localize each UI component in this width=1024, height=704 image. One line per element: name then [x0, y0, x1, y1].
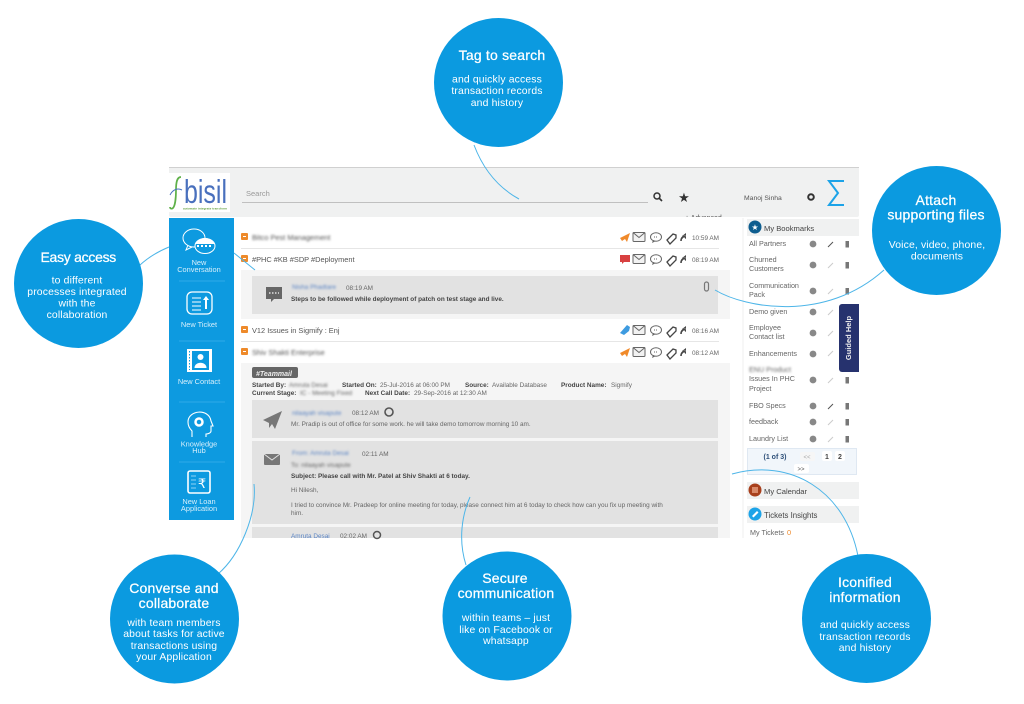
nav: new conversation: New — [192, 258, 207, 267]
row: Shiv Shakti Enterprise: 08:12 AM — [692, 350, 719, 357]
header bar — [169, 167, 859, 222]
nav: new contact — [178, 349, 220, 386]
settings icon — [808, 194, 814, 200]
row: Bitco Pest Management: 10:59 AM — [692, 235, 719, 242]
my tickets: My Tickets — [750, 528, 784, 537]
app screenshot panel — [169, 167, 859, 540]
row: V12 issues in Sigmify — [241, 325, 719, 342]
my calendar heading — [747, 482, 859, 499]
bookmark action icons — [810, 241, 849, 442]
tag: teammail — [252, 367, 298, 378]
bookmarks list: feedback — [749, 417, 779, 426]
expanded note panel: Steps to be followed while deployment of patch on test stage and live. — [291, 296, 504, 303]
callout: iconified information: transaction records — [819, 632, 911, 643]
note icon — [266, 287, 282, 302]
thread metadata: Current Stage: — [252, 390, 296, 397]
callout: secure communication — [442, 552, 572, 680]
row: Shiv Shakti Enterprise — [241, 348, 719, 359]
thread metadata: Sigmify — [611, 382, 633, 389]
message: email: Hi Nilesh, — [291, 487, 319, 494]
callout: tag to search: Tag to search — [459, 47, 545, 63]
my calendar heading: My Calendar — [764, 487, 808, 496]
pager: 1 — [825, 454, 829, 461]
callout: easy access: Easy access — [40, 249, 116, 265]
nav: new loan application — [181, 471, 217, 513]
nav: knowledge hub: Knowledge — [181, 440, 217, 448]
bookmarks heading: ★ — [751, 223, 759, 232]
row: V12 issues in Sigmify: 08:16 AM — [692, 328, 719, 335]
message: email: 02:11 AM — [362, 451, 389, 458]
callout: converse and collaborate: collaborate — [139, 595, 209, 611]
nav: new ticket: New Ticket — [181, 320, 217, 329]
callout: easy access: collaboration — [47, 310, 108, 321]
expanded thread panel — [241, 363, 730, 540]
bookmarks list: Churned — [749, 255, 777, 264]
callout: easy access — [14, 219, 143, 348]
callout: secure communication: communication — [458, 585, 554, 601]
connector: converse — [218, 484, 254, 574]
connector: iconified information — [732, 470, 858, 556]
callout: easy access: with the — [57, 298, 96, 310]
expanded note panel — [241, 270, 730, 319]
callout: tag to search: transaction records — [451, 86, 543, 97]
thread metadata: Amruta Desai — [289, 382, 328, 389]
right sidebar — [743, 218, 859, 538]
callout: easy access: to different — [52, 276, 102, 286]
my tickets: 0 — [787, 528, 791, 537]
message: plane: 08:12 AM — [352, 410, 379, 417]
nav: new contact: New Contact — [178, 377, 220, 386]
nav: new conversation: Conversation — [177, 265, 221, 274]
guided help tab: Guided Help — [844, 315, 853, 360]
callout: iconified information: information — [829, 589, 901, 605]
logo: automate integrate transform — [183, 206, 227, 210]
callout: tag to search: and quickly access — [452, 74, 542, 86]
callout: converse and collaborate — [110, 554, 239, 684]
row: Bitco Pest Management — [241, 232, 719, 248]
thread metadata: Next Call Date: — [365, 390, 410, 397]
bookmarks list: Laundry List — [749, 434, 788, 443]
pager: >> — [797, 467, 805, 473]
callout: converse and collaborate: Converse and — [129, 580, 219, 596]
bookmarks list: Communication — [749, 281, 799, 290]
message: email: I tried to convince Mr. Pradeep for online meeting for today, please connect him at 6 today to check how can you fix up meeting with — [291, 502, 663, 509]
search field: Search — [246, 189, 270, 198]
callout: secure communication: within teams – just — [461, 613, 550, 624]
thread metadata: Started By: — [252, 382, 286, 389]
bookmarks list: All Partners — [749, 239, 787, 248]
bookmarks list: Enhancements — [749, 349, 797, 358]
callout: secure communication: like on Facebook or — [459, 625, 553, 636]
callout: attach supporting files: Voice, video, phone, — [889, 240, 985, 251]
thread metadata: IC - Meeting Fixed — [300, 390, 353, 397]
message: email: Subject: Please call with Mr. Patel at Shiv Shakti at 6 today. — [291, 473, 470, 480]
callout: attach supporting files: documents — [911, 252, 963, 262]
message: email: To: nilaayah visapute — [291, 462, 351, 469]
thread metadata — [252, 382, 633, 397]
guided help tab — [839, 304, 859, 372]
tag: teammail: #Teammail — [256, 371, 293, 378]
paperclip icon — [704, 282, 708, 291]
callout: secure communication: Secure — [482, 570, 528, 586]
message: email: From: Amruta Desai — [292, 450, 349, 457]
row: deployment tags: 08:19 AM — [692, 257, 719, 264]
thread metadata: Available Database — [492, 382, 547, 389]
callout: iconified information: Iconified — [838, 574, 892, 590]
callout: easy access: processes integrated — [27, 287, 127, 298]
callout: iconified information: and quickly access — [820, 620, 910, 631]
message: plane: nilaayah visapute — [292, 410, 342, 417]
expanded note panel: Nisha Phadtare — [292, 284, 336, 291]
callout: attach supporting files — [872, 166, 1001, 295]
message: plane: Mr. Pradip is out of office for some work. he will take demo tomorrow morning 10 am. — [291, 421, 531, 428]
row: Shiv Shakti Enterprise: Shiv Shakti Enterprise — [252, 348, 325, 357]
bookmarks list: Customers — [749, 264, 784, 273]
bookmarks list: Issues In PHC — [749, 374, 795, 383]
bookmarks list: Contact list — [749, 332, 785, 341]
callout: converse and collaborate: transactions using — [131, 641, 217, 652]
message: plane — [252, 400, 718, 438]
connector: attach files — [715, 270, 884, 307]
callout: secure communication: whatsapp — [482, 636, 529, 647]
message: partial: Amruta Desai — [291, 533, 330, 540]
callout: attach supporting files: supporting files — [887, 206, 985, 222]
callout: attach supporting files: Attach — [916, 192, 956, 208]
bookmarks list: ENU Product — [749, 365, 791, 374]
sigma icon — [829, 181, 844, 205]
bookmarks heading — [747, 219, 859, 236]
bookmarks list: FBO Specs — [749, 401, 786, 410]
tickets insights heading: Tickets Insights — [764, 511, 818, 520]
pager: (1 of 3) — [764, 454, 786, 461]
nav: new ticket — [181, 292, 217, 329]
logo — [169, 173, 230, 212]
row: Bitco Pest Management: Bitco Pest Management — [252, 233, 330, 242]
star icon: ★ — [678, 190, 690, 205]
message: partial: 02:02 AM — [340, 533, 367, 540]
nav: knowledge hub — [181, 412, 217, 455]
callout: tag to search: and history — [471, 98, 524, 109]
row: deployment tags — [241, 254, 719, 266]
connector: secure communication — [462, 497, 470, 565]
bookmarks list: Project — [749, 384, 771, 393]
thread metadata: Product Name: — [561, 382, 606, 389]
thread metadata: Source: — [465, 382, 489, 389]
message: email — [252, 441, 718, 524]
sidebar — [169, 218, 234, 520]
bookmarks list: Employee — [749, 323, 781, 332]
row: deployment tags: #PHC #KB #SDP #Deployment — [252, 255, 355, 264]
nav: knowledge hub: Hub — [192, 446, 206, 455]
thread metadata: 29-Sep-2016 at 12:30 AM — [414, 390, 487, 397]
logo: bisil — [184, 173, 227, 210]
advanced link: + Advanced — [685, 215, 722, 222]
search icon — [654, 193, 662, 201]
callout: converse and collaborate: about tasks for active — [123, 629, 225, 640]
callout: converse and collaborate: your Application — [136, 652, 212, 663]
expanded note panel: 08:19 AM — [346, 285, 373, 292]
nav: new loan application: ₹ — [198, 477, 206, 492]
callout: iconified information: and history — [839, 643, 892, 654]
bookmarks list — [749, 239, 799, 443]
bookmarks list: Pack — [749, 290, 765, 299]
thread metadata: 25-Jul-2016 at 06:00 PM — [380, 382, 450, 389]
callout: converse and collaborate: with team members — [126, 618, 221, 629]
row: V12 issues in Sigmify: V12 Issues in Sigmify : Enj — [252, 326, 340, 335]
conversation rows — [241, 232, 730, 540]
bookmarks list: Demo given — [749, 307, 787, 316]
thread metadata: Started On: — [342, 382, 377, 389]
pager: 2 — [838, 454, 842, 461]
callout: tag to search — [434, 18, 563, 147]
tickets insights heading — [747, 506, 859, 523]
message: partial — [252, 527, 718, 540]
message: email: him. — [291, 510, 303, 517]
nav: new loan application: Application — [181, 504, 217, 513]
pager: << — [803, 455, 811, 461]
user name: Manoj Sinha — [744, 195, 782, 202]
pager — [748, 448, 856, 474]
connector: tag to search — [474, 145, 519, 199]
callout: iconified information — [802, 554, 931, 683]
connector: easy access — [140, 247, 255, 270]
nav: new loan application: New Loan — [182, 497, 216, 506]
bookmarks heading: My Bookmarks — [764, 224, 814, 233]
nav: new conversation — [177, 229, 221, 274]
